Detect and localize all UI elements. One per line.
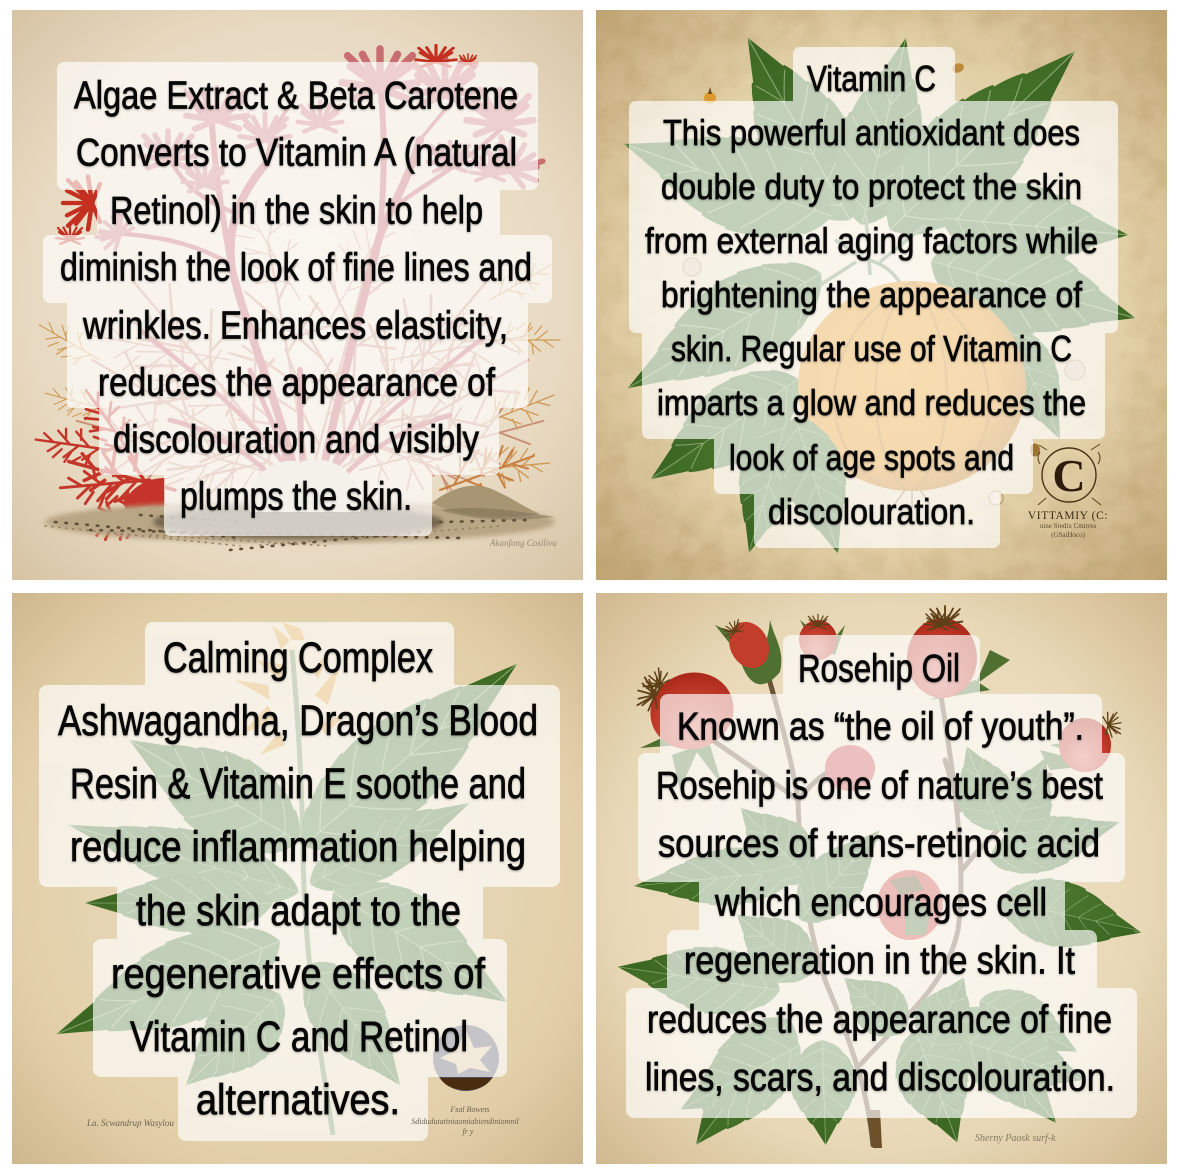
description text (60, 74, 532, 518)
illustration: rosehip branch (613, 606, 1149, 1168)
description text: Resin & Vitamin E soothe and (70, 761, 526, 808)
illustration: coral-like algae (31, 45, 561, 550)
description text: Converts to Vitamin A (natural (76, 132, 517, 174)
description text: double duty to protect the skin (661, 166, 1082, 207)
description text: Rosehip is one of nature’s best (656, 764, 1103, 808)
translucent text backdrop (43, 62, 552, 536)
description text: Calming Complex (163, 635, 433, 682)
description text: the skin adapt to the (136, 888, 461, 935)
description text: discolouration and visibly (113, 418, 479, 462)
panel 3 parchment background (12, 593, 583, 1164)
seabed and sand (45, 459, 555, 550)
rosehips (634, 606, 1123, 940)
caption: right: fr y (463, 1127, 474, 1136)
description text: reduce inflammation helping (70, 824, 526, 871)
description text: regenerative effects of (111, 951, 485, 998)
description text: plumps the skin. (180, 476, 412, 518)
dark tip leaf bottom (1014, 876, 1143, 959)
translucent text backdrop (626, 635, 1137, 1118)
description text: Rosehip Oil (798, 648, 960, 690)
description text: reduces the appearance of fine (647, 998, 1112, 1042)
description text (645, 58, 1098, 532)
description text: from external aging factors while (645, 220, 1098, 261)
caption: right: Fsal Bowets (449, 1105, 490, 1114)
fruit (798, 215, 1026, 508)
logo: vitamin C emblem: VITTAMIY (C: (1028, 510, 1108, 522)
stem and flowers (235, 622, 350, 1135)
hip crowns (634, 606, 1123, 738)
panel: vitamin C (596, 10, 1167, 580)
description text: reduces the appearance of (98, 362, 495, 404)
description text: Retinol) in the skin to help (110, 190, 483, 232)
description text: wrinkles. Enhances elasticity, (82, 304, 508, 348)
description text: Known as “the oil of youth”. (677, 706, 1084, 748)
signature: Akanfong Cosilivu (489, 538, 557, 548)
description text: Vitamin C and Retinol (130, 1014, 468, 1061)
translucent text backdrop (39, 622, 560, 1141)
description text: imparts a glow and reduces the (657, 382, 1086, 423)
illustration: citrus fruit and leaves (605, 15, 1148, 563)
small seeds (683, 62, 1085, 522)
panel 2 parchment background (596, 10, 1167, 580)
description text: Ashwagandha, Dragon’s Blood (58, 698, 538, 745)
seed cross-section (433, 1025, 499, 1091)
description text: lines, scars, and discolouration. (645, 1056, 1115, 1100)
description text: diminish the look of fine lines and (60, 246, 532, 290)
description text: alternatives. (196, 1077, 400, 1124)
description text: Vitamin C (807, 58, 936, 99)
caption: left: La. Scwandrup Wasylou (86, 1118, 174, 1128)
description text: which encourages cell (714, 882, 1047, 924)
panel: calming complex (12, 593, 583, 1164)
description text: brightening the appearance of (661, 274, 1083, 315)
panel: rosehip oil (596, 593, 1167, 1168)
illustration: botanical stem with leaves (40, 622, 548, 1135)
description text: skin. Regular use of Vitamin C (671, 328, 1072, 369)
panel 4 parchment background (596, 593, 1167, 1164)
description text: This powerful antioxidant does (663, 112, 1080, 153)
logo: vitamin C emblem (1028, 444, 1108, 539)
caption: right: Sdidudutatiniaomiabiendiniomnil (411, 1117, 520, 1126)
caption: right (411, 1105, 520, 1136)
description text: look of age spots and (729, 437, 1014, 478)
panel 1 parchment background (12, 10, 583, 580)
panel: algae extract and beta carotene (12, 10, 583, 580)
description text: discolouration. (768, 491, 975, 532)
description text: sources of trans-retinoic acid (658, 822, 1100, 866)
description text (58, 635, 538, 1124)
description text: regeneration in the skin. It (684, 940, 1075, 982)
description text (645, 648, 1115, 1100)
logo: vitamin C emblem: uine Sredix Cmirres (1040, 522, 1096, 530)
signature: Sherny Paosk surf-k (975, 1133, 1056, 1144)
stem base (869, 1110, 882, 1148)
branches (690, 665, 1050, 1145)
description text: Algae Extract & Beta Carotene (74, 74, 518, 118)
translucent text backdrop (629, 47, 1118, 548)
logo: vitamin C emblem: (GSaiHoco) (1051, 531, 1086, 539)
logo: vitamin C emblem: C (1052, 450, 1086, 501)
